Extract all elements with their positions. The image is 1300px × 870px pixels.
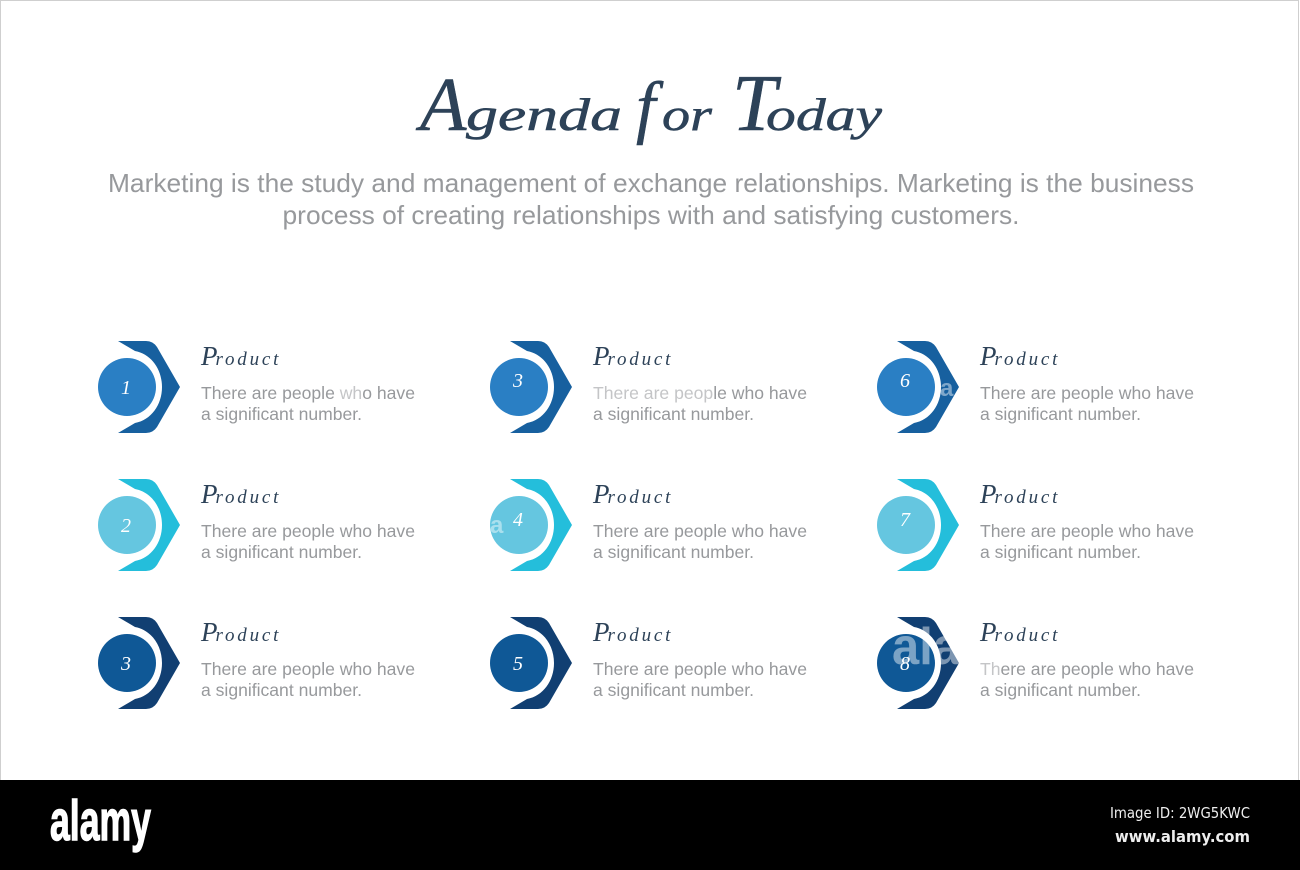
subtitle text block: Marketing is the study and management of exchange relationships. Marketing is the business bbox=[108, 170, 1194, 198]
agenda item 2 bbox=[98, 479, 415, 571]
image id: Image ID: 2WG5KWC bbox=[1110, 804, 1250, 822]
icon: chevron badge 2 bbox=[98, 479, 180, 571]
item heading: P bbox=[200, 617, 218, 647]
item heading: P bbox=[200, 479, 218, 509]
icon: chevron badge 4 bbox=[490, 341, 572, 433]
subtitle text block: process of creating relationships with and satisfying customers. bbox=[282, 202, 1020, 230]
agenda item 5 bbox=[490, 479, 807, 571]
icon: chevron badge 7 bbox=[877, 341, 959, 433]
item heading: roduct bbox=[994, 487, 1060, 508]
item description: There are people who have bbox=[201, 659, 415, 679]
item description: a significant number. bbox=[201, 542, 362, 562]
item heading: P bbox=[592, 479, 610, 509]
icon: chevron badge 1: 1 bbox=[121, 377, 131, 399]
item heading: P bbox=[592, 617, 610, 647]
item description: a significant number. bbox=[593, 542, 754, 562]
item description: a significant number. bbox=[980, 542, 1141, 562]
item heading: roduct bbox=[608, 487, 673, 508]
item heading: roduct bbox=[608, 349, 673, 370]
item heading: roduct bbox=[994, 625, 1060, 646]
icon: chevron badge 5: a bbox=[490, 512, 504, 539]
item description: There are people who have bbox=[980, 383, 1194, 403]
item heading: P bbox=[592, 341, 610, 371]
item description: a significant number. bbox=[201, 404, 362, 424]
item description bbox=[593, 383, 807, 424]
item heading: P bbox=[979, 617, 996, 647]
item heading: P bbox=[200, 341, 218, 371]
item description bbox=[980, 383, 1194, 424]
agenda item 6 bbox=[490, 617, 807, 709]
icon: chevron badge 9: ala bbox=[892, 618, 961, 676]
item description bbox=[201, 521, 415, 562]
item description: There are people who have bbox=[593, 521, 807, 541]
item description bbox=[980, 521, 1194, 562]
agenda item 3 bbox=[98, 617, 415, 709]
item description: There are people who have bbox=[980, 521, 1194, 541]
item description: a significant number. bbox=[980, 404, 1141, 424]
item heading: P bbox=[979, 479, 996, 509]
item description bbox=[593, 521, 807, 562]
icon: chevron badge 4: 3 bbox=[512, 370, 523, 392]
item description bbox=[201, 659, 415, 700]
item description: There are people who have bbox=[201, 521, 415, 541]
icon: chevron badge 3: 3 bbox=[120, 653, 131, 675]
website: www.alamy.com bbox=[1115, 827, 1250, 846]
item heading: roduct bbox=[994, 349, 1060, 370]
icon: chevron badge 8 bbox=[877, 479, 959, 571]
icon: chevron badge 5: 4 bbox=[513, 509, 523, 531]
subtitle text block bbox=[108, 170, 1194, 230]
agenda item 7 bbox=[877, 341, 1194, 433]
item heading: roduct bbox=[608, 625, 673, 646]
agenda item 1 bbox=[98, 341, 415, 433]
title: f bbox=[636, 69, 664, 146]
icon: chevron badge 2: 2 bbox=[121, 515, 131, 537]
icon: chevron badge 6 bbox=[490, 617, 572, 709]
title: oday bbox=[766, 89, 883, 140]
title: genda bbox=[466, 89, 622, 140]
item heading: roduct bbox=[216, 487, 281, 508]
title: or bbox=[662, 89, 713, 140]
item description bbox=[593, 659, 807, 700]
icon: chevron badge 5 bbox=[490, 479, 572, 571]
item description: There are people who have bbox=[593, 383, 807, 403]
title: A bbox=[415, 63, 467, 147]
agenda item 4 bbox=[490, 341, 807, 433]
item description: a significant number. bbox=[201, 680, 362, 700]
item description: a significant number. bbox=[980, 680, 1141, 700]
item description: a significant number. bbox=[593, 404, 754, 424]
icon: chevron badge 9: 8 bbox=[900, 653, 910, 675]
item heading: P bbox=[979, 341, 996, 371]
item heading: roduct bbox=[216, 625, 281, 646]
item description bbox=[980, 659, 1194, 700]
icon: chevron badge 6: 5 bbox=[513, 653, 523, 675]
icon: chevron badge 9 bbox=[877, 617, 961, 709]
icon: chevron badge 7: 6 bbox=[900, 370, 910, 392]
footer bar bbox=[0, 780, 1300, 870]
icon: chevron badge 8: 7 bbox=[900, 509, 911, 531]
footer logo: alamy bbox=[50, 789, 151, 853]
icon: chevron badge 1 bbox=[98, 341, 180, 433]
item description: a significant number. bbox=[593, 680, 754, 700]
item description bbox=[201, 383, 415, 424]
item description: There are people who have bbox=[593, 659, 807, 679]
item heading: roduct bbox=[216, 349, 281, 370]
icon: chevron badge 3 bbox=[98, 617, 180, 709]
item description: There are people who have bbox=[980, 659, 1194, 679]
agenda item 8 bbox=[877, 479, 1194, 571]
agenda item 9 bbox=[877, 617, 1194, 709]
title: T bbox=[732, 60, 782, 148]
item description: There are people who have bbox=[201, 383, 415, 403]
icon: chevron badge 7: a bbox=[940, 375, 954, 402]
